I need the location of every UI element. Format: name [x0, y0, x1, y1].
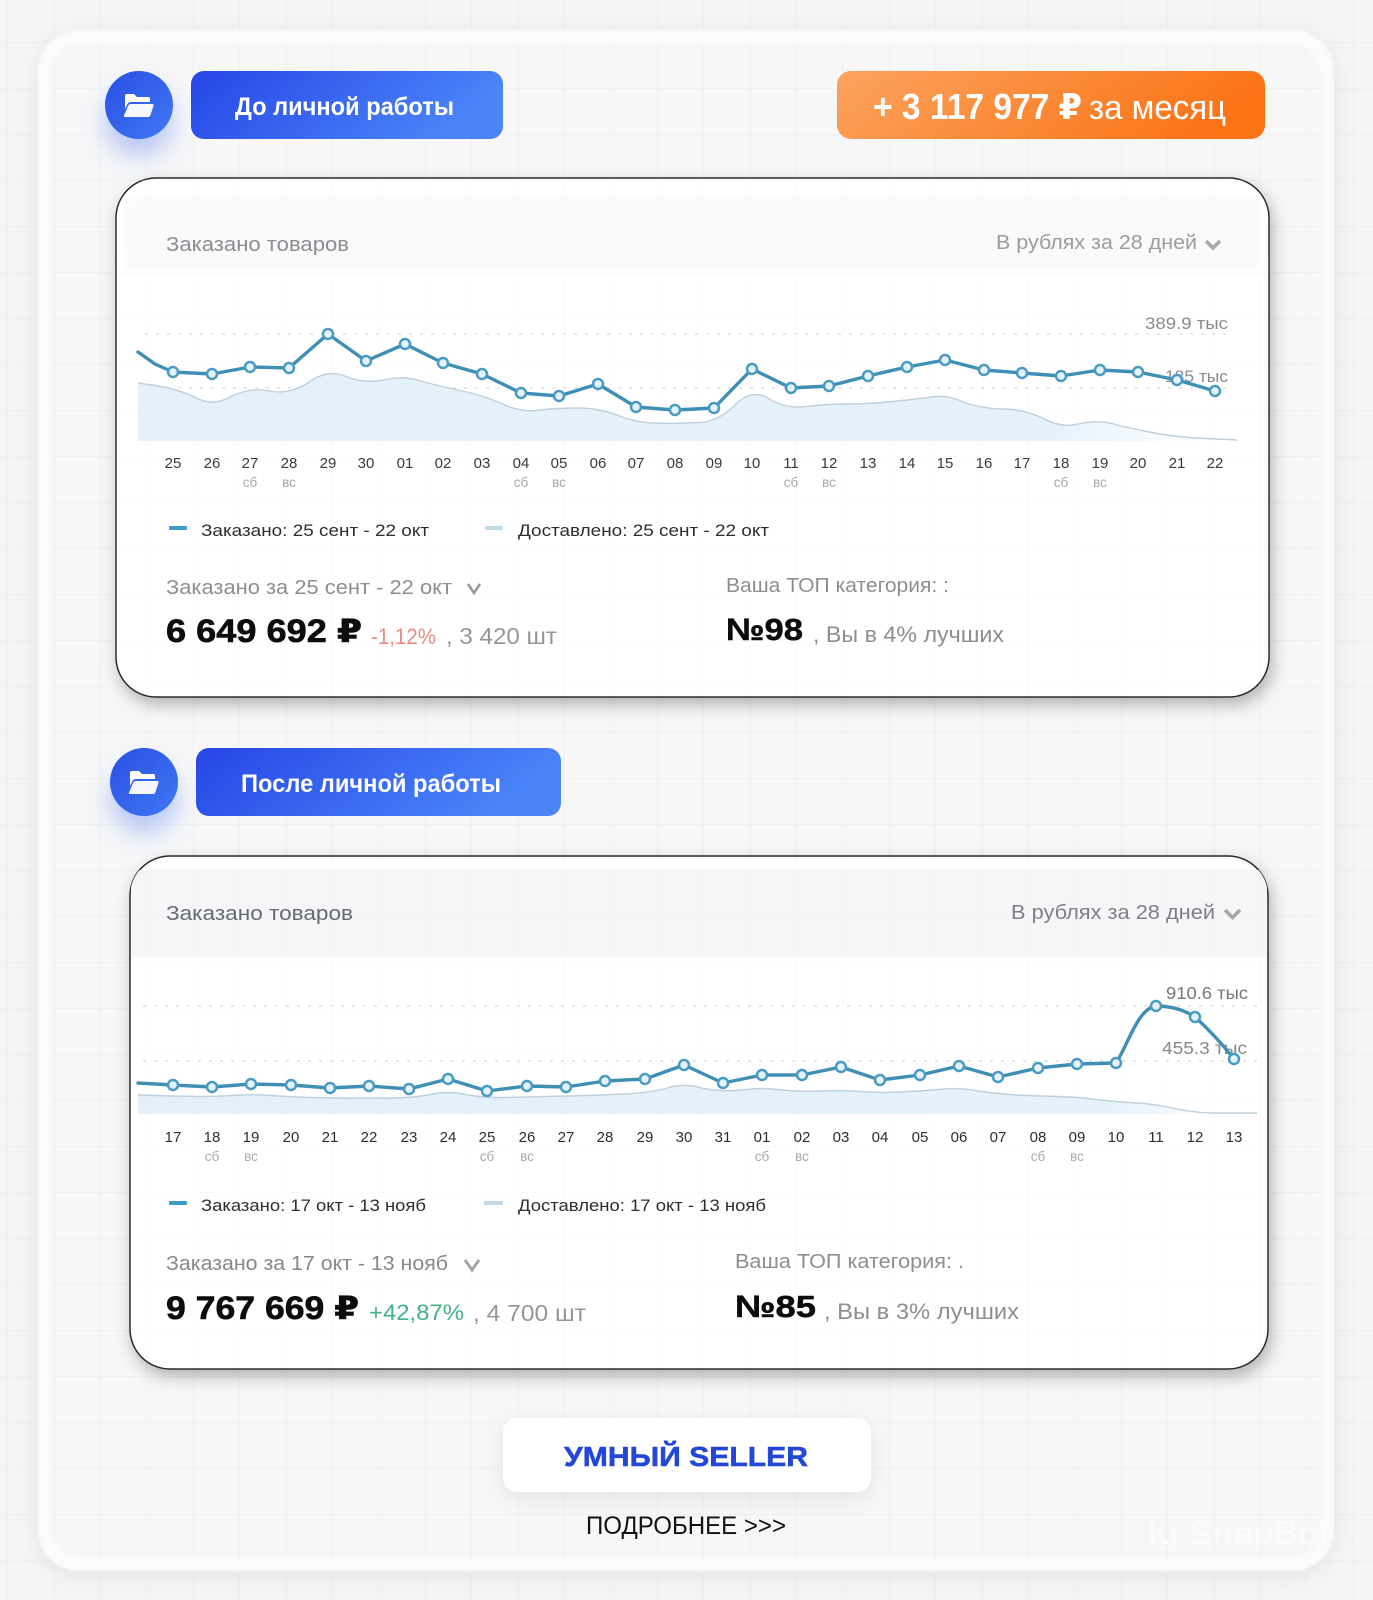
- metric: ordered total before: [166, 577, 557, 649]
- x-axis dates after: 31: [715, 1129, 731, 1146]
- brand button: [503, 1418, 871, 1492]
- line chart before: 185 тыс: [1165, 368, 1228, 386]
- x-axis dates after: 06: [951, 1129, 967, 1146]
- metric: ordered total before: Заказано за 25 сент - 22 окт: [166, 577, 452, 599]
- x-axis dates after: сб: [1031, 1149, 1046, 1164]
- x-axis dates before: 22: [1207, 455, 1223, 472]
- x-axis dates before: 20: [1130, 455, 1146, 472]
- x-axis dates before: 11: [783, 455, 799, 472]
- x-axis dates before: 27: [242, 455, 258, 472]
- icon: folder (after): [110, 748, 178, 816]
- x-axis dates before: 06: [590, 455, 606, 472]
- x-axis dates after: 09: [1069, 1129, 1085, 1146]
- x-axis dates before: [165, 455, 1223, 490]
- label: before personal work: [191, 71, 503, 139]
- label: before personal work: До личной работы: [235, 93, 454, 121]
- legend after: Доставлено: 17 окт - 13 нояб: [518, 1196, 766, 1215]
- x-axis dates after: 25: [479, 1129, 495, 1146]
- x-axis dates before: 17: [1014, 455, 1030, 472]
- x-axis dates after: вс: [795, 1149, 809, 1164]
- line chart before: 389.9 тыс: [1145, 315, 1228, 333]
- x-axis dates after: сб: [480, 1149, 495, 1164]
- legend after: Заказано: 17 окт - 13 нояб: [201, 1196, 426, 1215]
- x-axis dates before: 02: [435, 455, 451, 472]
- x-axis dates after: 21: [322, 1129, 338, 1146]
- x-axis dates before: 19: [1092, 455, 1108, 472]
- label: after personal work: [196, 748, 561, 816]
- x-axis dates before: 05: [551, 455, 567, 472]
- x-axis dates before: 28: [281, 455, 297, 472]
- x-axis dates before: 15: [937, 455, 953, 472]
- label: after personal work: После личной работы: [241, 770, 501, 798]
- x-axis dates after: 23: [401, 1129, 417, 1146]
- x-axis dates after: 26: [519, 1129, 535, 1146]
- x-axis dates after: 07: [990, 1129, 1006, 1146]
- badge: monthly gain: + 3 117 977 ₽: [873, 86, 1082, 127]
- metric: top category after: Ваша ТОП категория: .: [735, 1251, 964, 1273]
- more link: ПОДРОБНЕЕ >>>: [586, 1512, 786, 1540]
- x-axis dates after: 02: [794, 1129, 810, 1146]
- x-axis dates after: сб: [755, 1149, 770, 1164]
- metric: ordered total after: +42,87%: [369, 1300, 464, 1325]
- x-axis dates before: сб: [784, 475, 799, 490]
- metric: top category after: [735, 1251, 1019, 1324]
- x-axis dates after: 19: [243, 1129, 259, 1146]
- card title: Заказано товаров: [166, 234, 349, 256]
- x-axis dates before: 07: [628, 455, 644, 472]
- x-axis dates after: 30: [676, 1129, 692, 1146]
- card title: Заказано товаров: [166, 903, 353, 925]
- x-axis dates before: вс: [552, 475, 566, 490]
- x-axis dates after: 08: [1030, 1129, 1046, 1146]
- x-axis dates before: 13: [860, 455, 876, 472]
- x-axis dates before: 16: [976, 455, 992, 472]
- metric: ordered total before: -1,12%: [371, 624, 436, 649]
- metric: top category after: , Вы в 3% лучших: [824, 1299, 1019, 1324]
- x-axis dates before: 21: [1169, 455, 1185, 472]
- x-axis dates before: 14: [899, 455, 915, 472]
- panel: chart card before: [116, 178, 1269, 697]
- icon: folder (before): [105, 71, 173, 139]
- legend after: [169, 1196, 766, 1215]
- x-axis dates before: 04: [513, 455, 529, 472]
- x-axis dates after: вс: [1070, 1149, 1084, 1164]
- x-axis dates after: сб: [205, 1149, 220, 1164]
- x-axis dates before: вс: [1093, 475, 1107, 490]
- x-axis dates after: 12: [1187, 1129, 1203, 1146]
- x-axis dates after: 04: [872, 1129, 888, 1146]
- badge: monthly gain: [837, 71, 1265, 139]
- x-axis dates after: 20: [283, 1129, 299, 1146]
- x-axis dates after: 17: [165, 1129, 181, 1146]
- x-axis dates before: 09: [706, 455, 722, 472]
- x-axis dates before: вс: [822, 475, 836, 490]
- x-axis dates after: 22: [361, 1129, 377, 1146]
- badge: monthly gain: за месяц: [1089, 89, 1226, 127]
- metric: ordered total after: [166, 1253, 586, 1326]
- legend before: Доставлено: 25 сент - 22 окт: [518, 521, 769, 540]
- x-axis dates after: [165, 1129, 1242, 1164]
- metric: ordered total after: Заказано за 17 окт - 13 нояб: [166, 1253, 448, 1275]
- x-axis dates after: 11: [1148, 1129, 1164, 1146]
- x-axis dates before: 01: [397, 455, 413, 472]
- x-axis dates before: вс: [282, 475, 296, 490]
- x-axis dates before: 12: [821, 455, 837, 472]
- x-axis dates after: 27: [558, 1129, 574, 1146]
- x-axis dates after: 18: [204, 1129, 220, 1146]
- metric: top category after: №85: [735, 1289, 816, 1324]
- metric: ordered total before: 6 649 692 ₽: [166, 613, 362, 649]
- header: before: [105, 71, 503, 139]
- x-axis dates after: 24: [440, 1129, 456, 1146]
- x-axis dates after: 29: [637, 1129, 653, 1146]
- metric: top category before: , Вы в 4% лучших: [813, 622, 1004, 647]
- x-axis dates before: сб: [243, 475, 258, 490]
- x-axis dates before: 26: [204, 455, 220, 472]
- line chart before: [138, 315, 1237, 441]
- period selector: В рублях за 28 дней: [996, 232, 1197, 254]
- metric: top category before: №98: [726, 612, 803, 647]
- brand button: УМНЫЙ SELLER: [564, 1440, 808, 1472]
- watermark: Ig:SnapBot: [1147, 1515, 1329, 1551]
- metric: top category before: [726, 575, 1004, 647]
- metric: top category before: Ваша ТОП категория: :: [726, 575, 949, 597]
- metric: ordered total before: , 3 420 шт: [446, 623, 557, 649]
- metric: ordered total after: 9 767 669 ₽: [166, 1290, 359, 1326]
- x-axis dates before: 08: [667, 455, 683, 472]
- x-axis dates before: 29: [320, 455, 336, 472]
- x-axis dates after: 01: [754, 1129, 770, 1146]
- metric: ordered total after: , 4 700 шт: [473, 1300, 586, 1326]
- x-axis dates before: 18: [1053, 455, 1069, 472]
- x-axis dates after: вс: [244, 1149, 258, 1164]
- x-axis dates after: 03: [833, 1129, 849, 1146]
- x-axis dates before: 30: [358, 455, 374, 472]
- x-axis dates after: вс: [520, 1149, 534, 1164]
- x-axis dates before: 25: [165, 455, 181, 472]
- line chart after: 455.3 тыс: [1162, 1038, 1247, 1058]
- line chart after: [138, 983, 1257, 1114]
- legend before: [169, 521, 769, 540]
- header: after: [110, 748, 561, 816]
- x-axis dates before: 03: [474, 455, 490, 472]
- x-axis dates after: 10: [1108, 1129, 1124, 1146]
- x-axis dates before: 10: [744, 455, 760, 472]
- x-axis dates after: 13: [1226, 1129, 1242, 1146]
- x-axis dates after: 05: [912, 1129, 928, 1146]
- legend before: Заказано: 25 сент - 22 окт: [201, 521, 429, 540]
- period selector: В рублях за 28 дней: [1011, 902, 1215, 924]
- panel: chart card after: [130, 856, 1268, 1369]
- line chart after: 910.6 тыс: [1166, 983, 1248, 1003]
- x-axis dates before: сб: [1054, 475, 1069, 490]
- x-axis dates before: сб: [514, 475, 529, 490]
- x-axis dates after: 28: [597, 1129, 613, 1146]
